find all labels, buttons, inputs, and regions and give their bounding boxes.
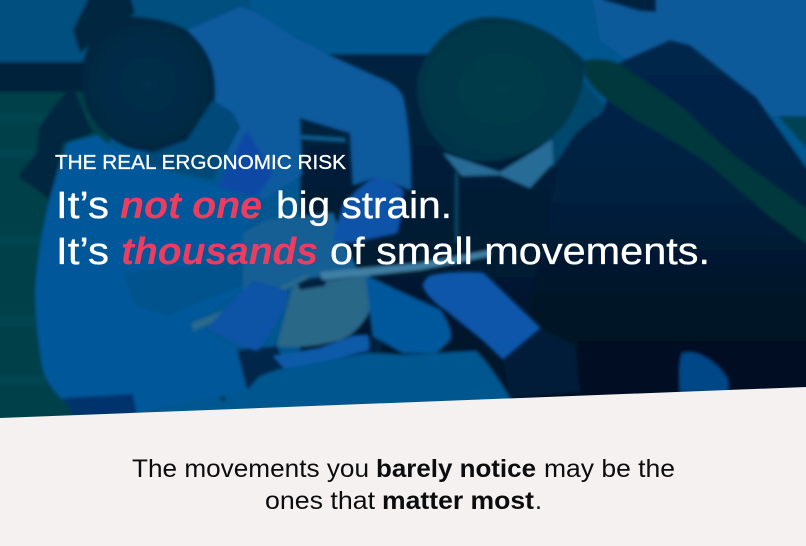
inner sleeve shadow — [123, 260, 243, 316]
statement line 1: The movements you — [132, 455, 369, 483]
statement line 1 — [132, 455, 675, 483]
patient blanket — [248, 348, 512, 406]
doctor left: lower sleeve band — [63, 394, 137, 418]
dark cabinets center — [300, 54, 600, 420]
dark mouth — [296, 276, 327, 290]
headline line 1: big strain. — [276, 185, 452, 227]
doctor right: glove — [423, 272, 540, 359]
statement line 2: ones that — [265, 487, 375, 515]
patient collar dark — [237, 346, 287, 390]
instrument handpiece — [192, 274, 309, 331]
doctor right: sleeve fold — [503, 328, 580, 398]
light vertical cabinet line — [455, 172, 458, 242]
headline line 1: not one — [120, 185, 262, 227]
doctor left lower glove — [207, 281, 287, 351]
doctor right: surgical mask — [443, 140, 553, 188]
dark clip — [368, 337, 390, 353]
instrument across — [320, 250, 490, 280]
headline — [56, 185, 710, 273]
doctor right: hair — [417, 17, 586, 161]
doctor left: upper coat, near arm — [187, 7, 411, 200]
doctor left: hair strands — [18, 87, 93, 200]
doctor right: neck — [542, 81, 605, 169]
left upper wall — [0, 0, 250, 62]
statement line 2: matter most — [382, 487, 535, 515]
statement line 1: barely notice — [376, 455, 536, 483]
green floor left — [0, 92, 110, 432]
doctor right: ponytail — [585, 59, 806, 260]
headline line 2: It’s — [56, 231, 109, 273]
doctor left: coat body — [35, 135, 262, 413]
dark lamp top — [600, 0, 656, 12]
statement line 2: . — [535, 487, 542, 515]
floor stripes — [0, 112, 90, 385]
eyebrow heading: THE REAL ERGONOMIC RISK — [55, 152, 347, 174]
photo: dentists treating a patient with blue overlay — [0, 0, 806, 432]
headline line 2 — [56, 231, 710, 273]
doctor left: bun — [73, 0, 135, 53]
patient bib — [273, 335, 370, 372]
coat button — [220, 396, 226, 402]
chair patch right — [679, 352, 728, 392]
doctor left: blue mask — [217, 130, 273, 197]
green patch right — [778, 114, 806, 150]
doctor left: face — [133, 100, 240, 180]
headline line 1 — [56, 185, 452, 227]
statement line 1: may be the — [544, 455, 675, 483]
headline line 2: thousands — [121, 231, 318, 273]
doctor left upper glove — [333, 177, 403, 243]
light strip between arms — [300, 135, 345, 142]
upper right light wall — [590, 0, 806, 116]
bottom statement — [132, 455, 675, 515]
patient forehead — [243, 213, 360, 290]
statement line 2 — [265, 487, 542, 515]
background wall — [107, 0, 806, 414]
doctor left: head hair — [82, 16, 215, 153]
doctor right: scrubs — [532, 38, 806, 398]
headline line 1: It’s — [56, 185, 109, 227]
patient chin — [277, 275, 370, 347]
headline line 2: of small movements. — [330, 231, 710, 273]
patient white drape — [365, 275, 451, 353]
dark band left — [0, 62, 100, 94]
